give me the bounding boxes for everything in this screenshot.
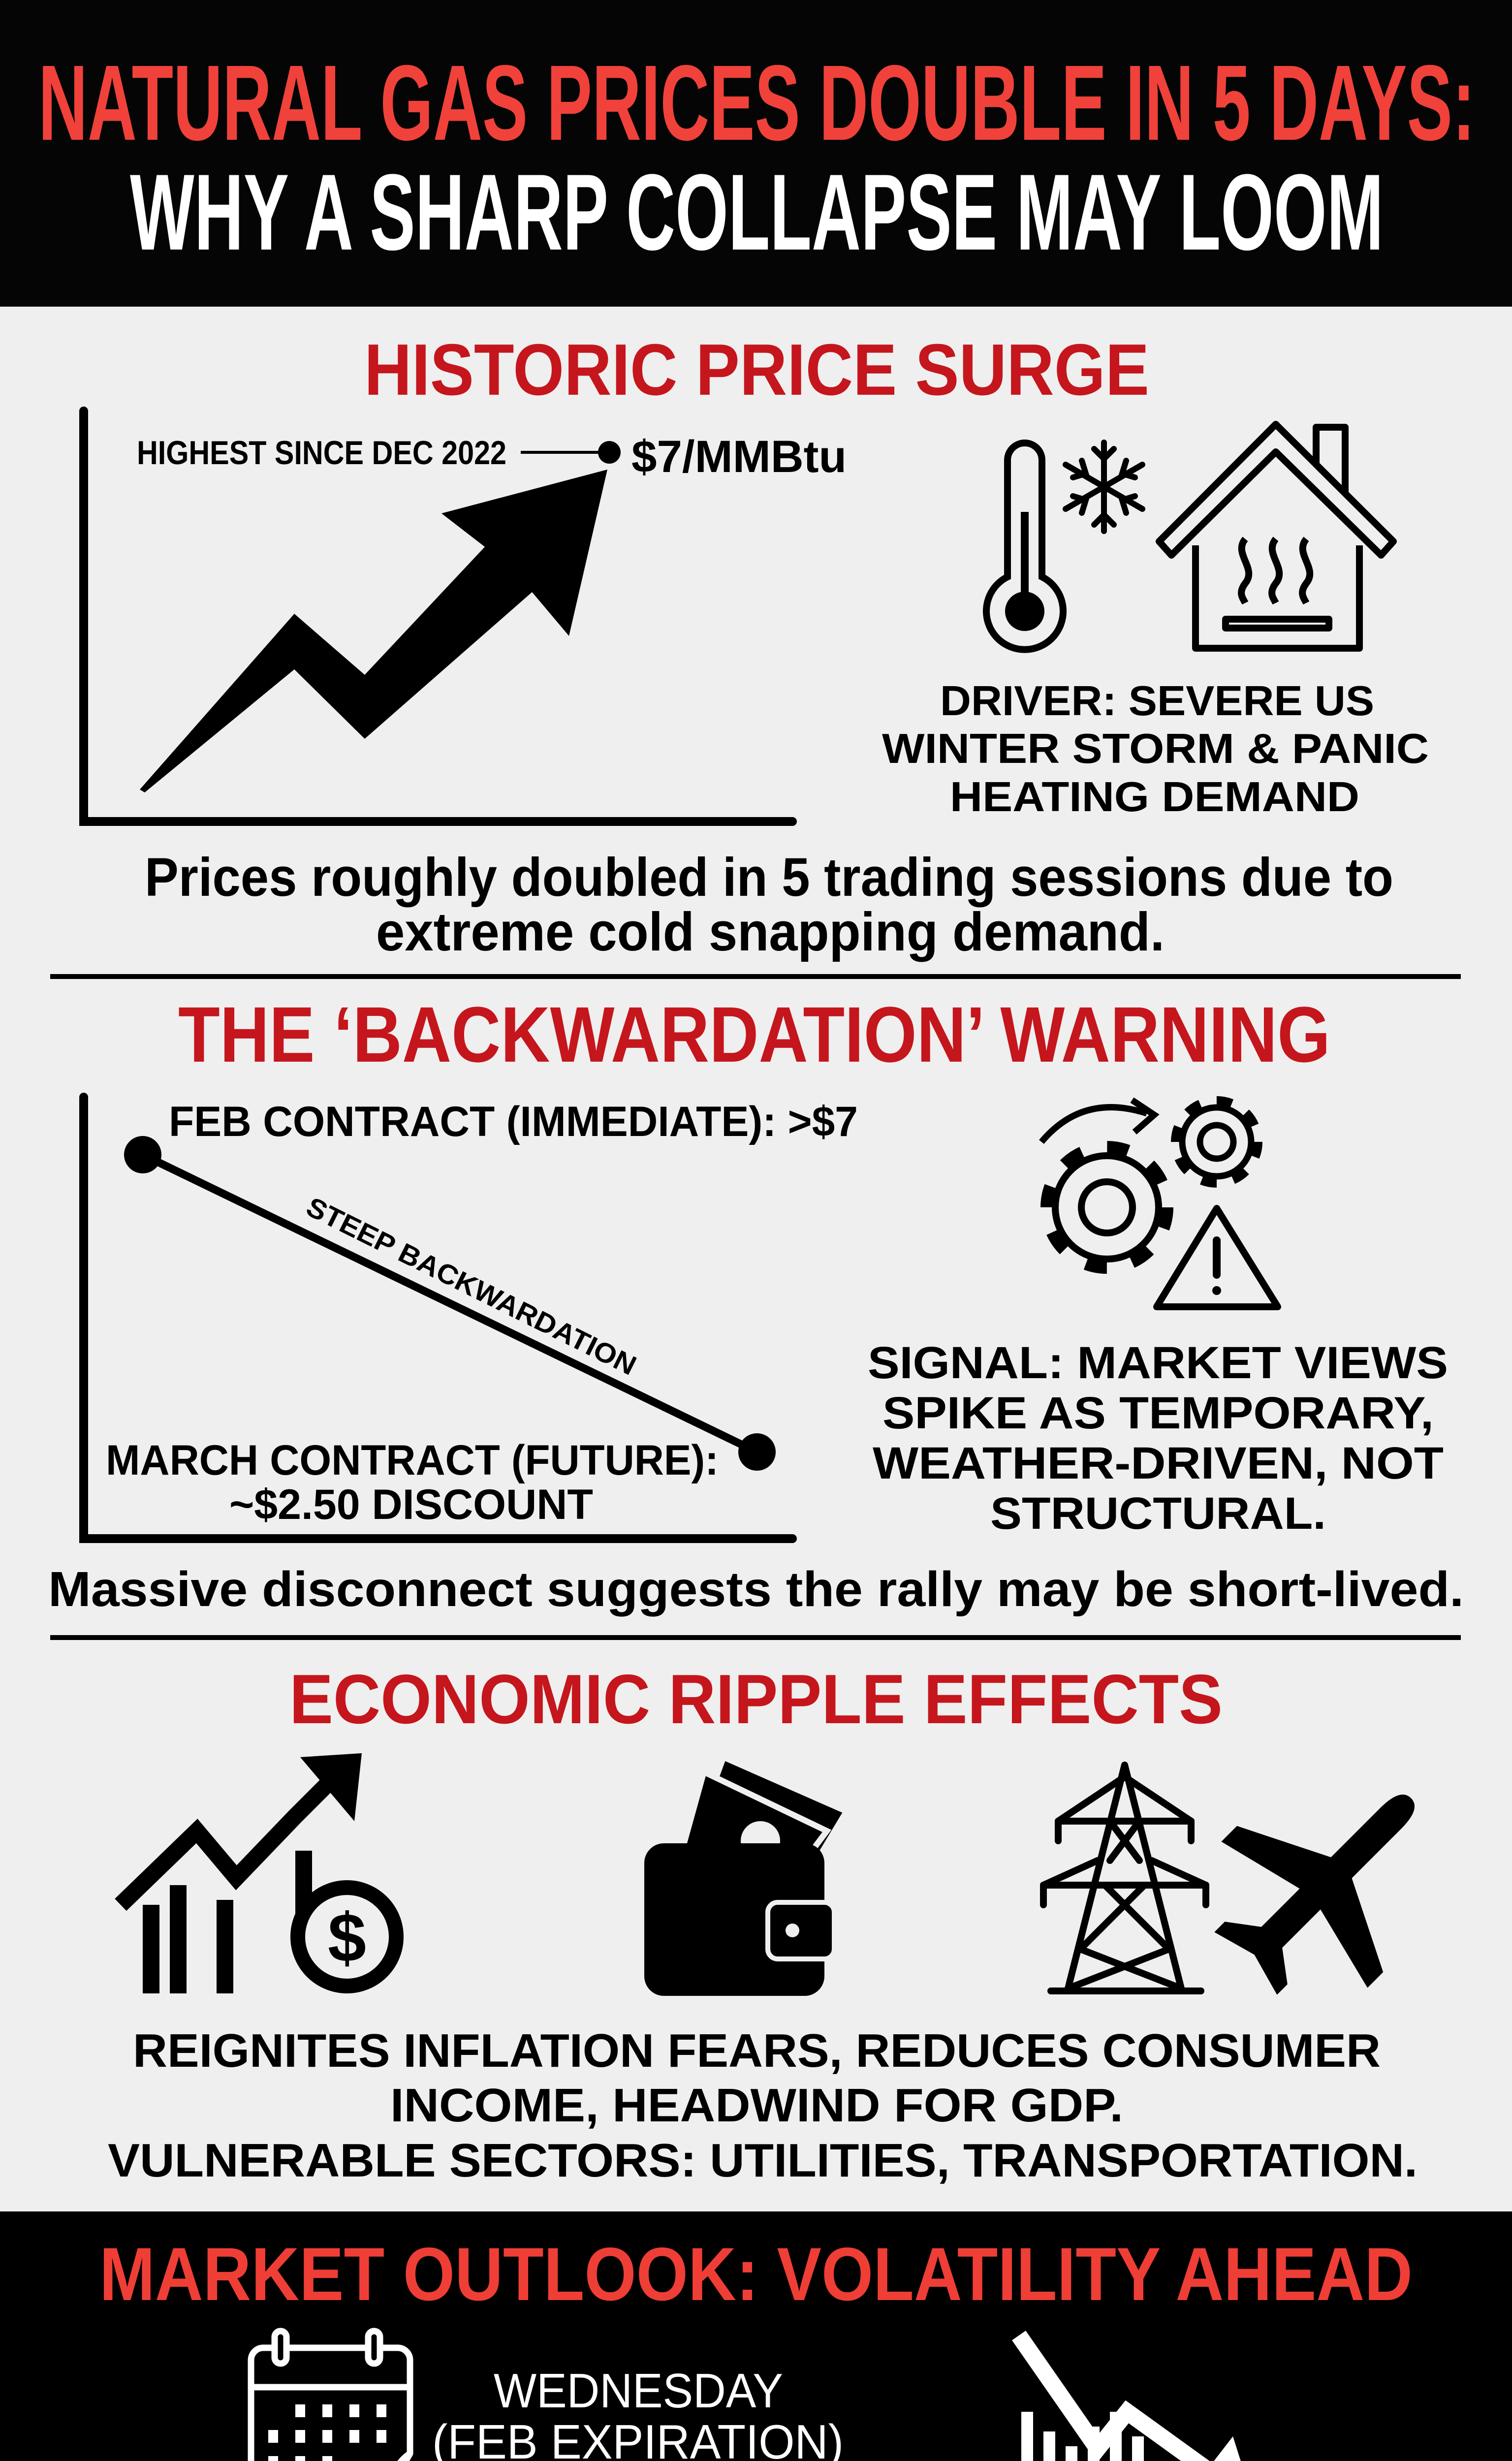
icon: power tower xyxy=(1043,1765,1206,1991)
icon: airplane xyxy=(1172,1725,1484,2037)
heading: historic price surge: HISTORIC PRICE SURGE xyxy=(364,329,1149,410)
chart: backwardation: ~$2.50 DISCOUNT xyxy=(229,1481,593,1528)
text: signal: WEATHER-DRIVEN, NOT xyxy=(873,1438,1444,1488)
icon: thermometer xyxy=(986,443,1063,650)
label: feb contract: FEB CONTRACT (IMMEDIATE): >$7 xyxy=(169,1098,858,1145)
label: highest since: HIGHEST SINCE DEC 2022 xyxy=(137,434,506,472)
icon: snowflake xyxy=(1066,442,1142,531)
text: wednesday: WEDNESDAY xyxy=(494,2364,783,2418)
text: prices doubled: extreme cold snapping demand. xyxy=(376,902,1165,962)
icon: heated house xyxy=(1159,424,1393,648)
icon: wallet xyxy=(644,1757,847,1996)
text: signal: STRUCTURAL. xyxy=(990,1488,1326,1539)
surge arrow xyxy=(140,470,607,792)
chart: price surge xyxy=(84,411,847,821)
icon: inflation chart with dollar: $ xyxy=(328,1899,366,1976)
icon: calendar xyxy=(251,2331,410,2461)
text: economic effects xyxy=(108,2024,1418,2187)
text: driver: HEATING DEMAND xyxy=(950,774,1359,820)
icon: gears and warning xyxy=(1041,1100,1278,1307)
text: prices doubled: Prices roughly doubled in 5 trading sessions due to xyxy=(145,847,1393,908)
text: economic effects: VULNERABLE SECTORS: UTILITIES, TRANSPORTATION. xyxy=(108,2134,1418,2187)
label: march contract: MARCH CONTRACT (FUTURE): xyxy=(106,1437,719,1484)
heading: backwardation warning: THE ‘BACKWARDATION’ WARNING xyxy=(178,990,1330,1078)
text: signal xyxy=(868,1338,1448,1539)
text: economic effects: REIGNITES INFLATION FEARS, REDUCES CONSUMER xyxy=(133,2024,1381,2077)
icon: falling chart xyxy=(1019,2335,1251,2461)
label: steep backwardation: STEEP BACKWARDATION xyxy=(302,1191,641,1381)
text: driver: WINTER STORM & PANIC xyxy=(882,726,1429,772)
header band xyxy=(0,0,1512,307)
label: price: $7/MMBtu xyxy=(631,432,847,482)
text: signal: SIGNAL: MARKET VIEWS xyxy=(868,1338,1448,1388)
text: driver xyxy=(882,678,1429,820)
text: signal: SPIKE AS TEMPORARY, xyxy=(882,1388,1434,1438)
heading: economic ripple effects: ECONOMIC RIPPLE EFFECTS xyxy=(289,1660,1223,1738)
chart: backwardation xyxy=(84,1097,858,1539)
text: massive disconnect: Massive disconnect suggests the rally may be short-lived. xyxy=(48,1562,1464,1617)
text: economic effects: INCOME, HEADWIND FOR GDP. xyxy=(390,2079,1123,2132)
panel: market outlook xyxy=(0,2211,1512,2461)
text: prices doubled xyxy=(145,847,1393,962)
text: driver: DRIVER: SEVERE US xyxy=(940,678,1374,725)
icon: inflation chart with dollar xyxy=(121,1753,396,1993)
